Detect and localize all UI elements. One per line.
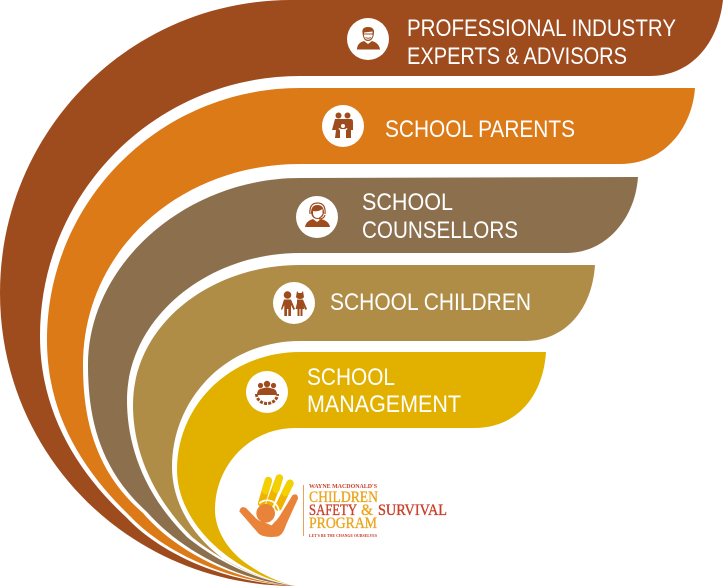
label: school counsellors: SCHOOL <box>362 189 453 216</box>
label: school management: SCHOOL <box>307 364 395 391</box>
divider and logo text: PROGRAM <box>309 515 377 532</box>
divider and logo text: CHILDREN <box>309 489 378 506</box>
label: professional industry experts <box>407 15 676 70</box>
divider and logo text <box>303 484 447 538</box>
icon: counsellor with headset <box>296 196 338 238</box>
icon: management team with gear <box>246 371 288 413</box>
divider and logo text: WAYNE MACDONALD'S <box>309 484 378 490</box>
logo: children safety and survival program <box>239 478 447 538</box>
label: school management <box>307 364 461 418</box>
icon: family <box>322 105 364 147</box>
panel: school counsellors band <box>88 177 638 586</box>
divider and logo text: LET'S BE THE CHANGE OURSELVES <box>309 533 377 538</box>
icon: two children <box>273 282 315 324</box>
icon: advisor <box>347 18 389 60</box>
label: professional industry experts: EXPERTS & ADVISORS <box>407 43 627 70</box>
label: school counsellors <box>362 189 518 244</box>
divider and logo text: SAFETY <box>309 502 357 519</box>
divider and logo text: & <box>361 502 373 519</box>
label: school parents: SCHOOL PARENTS <box>385 116 575 143</box>
divider and logo text: SURVIVAL <box>378 502 447 519</box>
label: school children: SCHOOL CHILDREN <box>330 289 531 316</box>
label: professional industry experts: PROFESSIONAL INDUSTRY <box>407 15 676 42</box>
label: school management: MANAGEMENT <box>307 391 461 418</box>
panel: school parents band <box>47 88 695 586</box>
panel: school children band <box>133 265 595 586</box>
icon: hand and child <box>239 478 298 537</box>
label: school counsellors: COUNSELLORS <box>362 217 518 244</box>
panel: school management band <box>177 352 546 586</box>
